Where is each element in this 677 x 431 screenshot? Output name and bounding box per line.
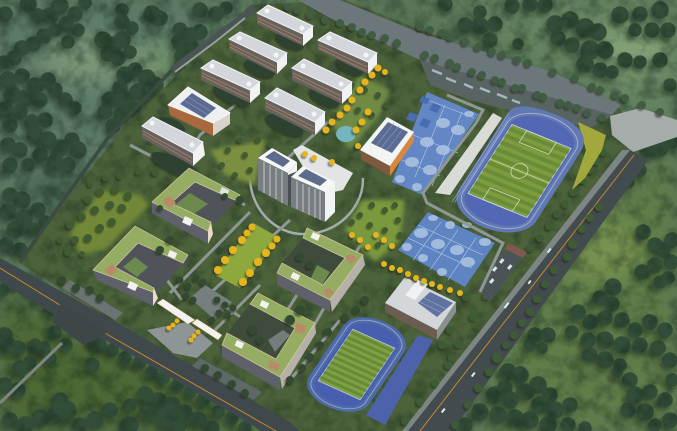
gardens with olive trees: [56, 75, 405, 262]
road: north road and parking: [298, 0, 677, 152]
yellow ginkgo trees: [166, 64, 463, 342]
green roof building west: [93, 226, 188, 306]
track field south: [307, 317, 433, 425]
dorm building B: [229, 32, 287, 74]
dorm building C: [201, 60, 260, 103]
tree rows along the north road: [284, 3, 664, 122]
grass field: [318, 329, 395, 400]
green roof building north-west: [152, 168, 240, 244]
plaza in front of main gate: [190, 285, 232, 320]
tower two: [291, 177, 325, 222]
tower one: [258, 158, 288, 206]
north basketball courts: [392, 92, 479, 195]
grandstand strip: [435, 113, 502, 195]
solar panels: [371, 122, 408, 153]
trees flanking the central plaza: [58, 193, 369, 397]
sports hall with solar roof: [360, 117, 414, 176]
solar panels: [418, 292, 453, 317]
circular campus road: [250, 165, 363, 234]
road: main road south-east: [402, 150, 648, 431]
dorm building F: [318, 32, 377, 74]
grass field: [468, 125, 571, 217]
green roof building east: [277, 228, 365, 312]
main gate canopy: [157, 299, 222, 340]
dorm building E: [142, 117, 205, 166]
dorm building A: [257, 5, 313, 46]
gymnasium south: [385, 277, 456, 340]
dorm building H: [265, 88, 325, 135]
dorm building G: [292, 59, 352, 104]
skylight: [405, 280, 428, 300]
infield: [456, 108, 583, 234]
administration towers: [258, 145, 353, 222]
tree rows along the south-east road: [374, 148, 607, 429]
pond: [336, 126, 356, 142]
green roof building south: [222, 293, 316, 390]
running track: [298, 308, 415, 421]
central lawn: [215, 223, 280, 288]
south basketball courts: [398, 212, 495, 287]
road: west access road with parked cars: [20, 8, 255, 262]
yellow grass patch beside the track: [572, 122, 606, 190]
tower connector: [288, 170, 300, 206]
dark shrubs between dorm blocks: [148, 28, 367, 183]
internal paths: [130, 92, 503, 380]
adjoining blue court: [366, 335, 433, 425]
parking lot south-east: [477, 243, 527, 302]
solar panels: [180, 93, 216, 118]
solar roof building D: [168, 87, 230, 136]
low podium: [293, 145, 353, 195]
running track: [445, 99, 594, 243]
track field north: [452, 106, 606, 232]
infield: [308, 316, 405, 413]
gate forecourt: [147, 322, 213, 358]
road: main road south-west: [0, 258, 300, 431]
